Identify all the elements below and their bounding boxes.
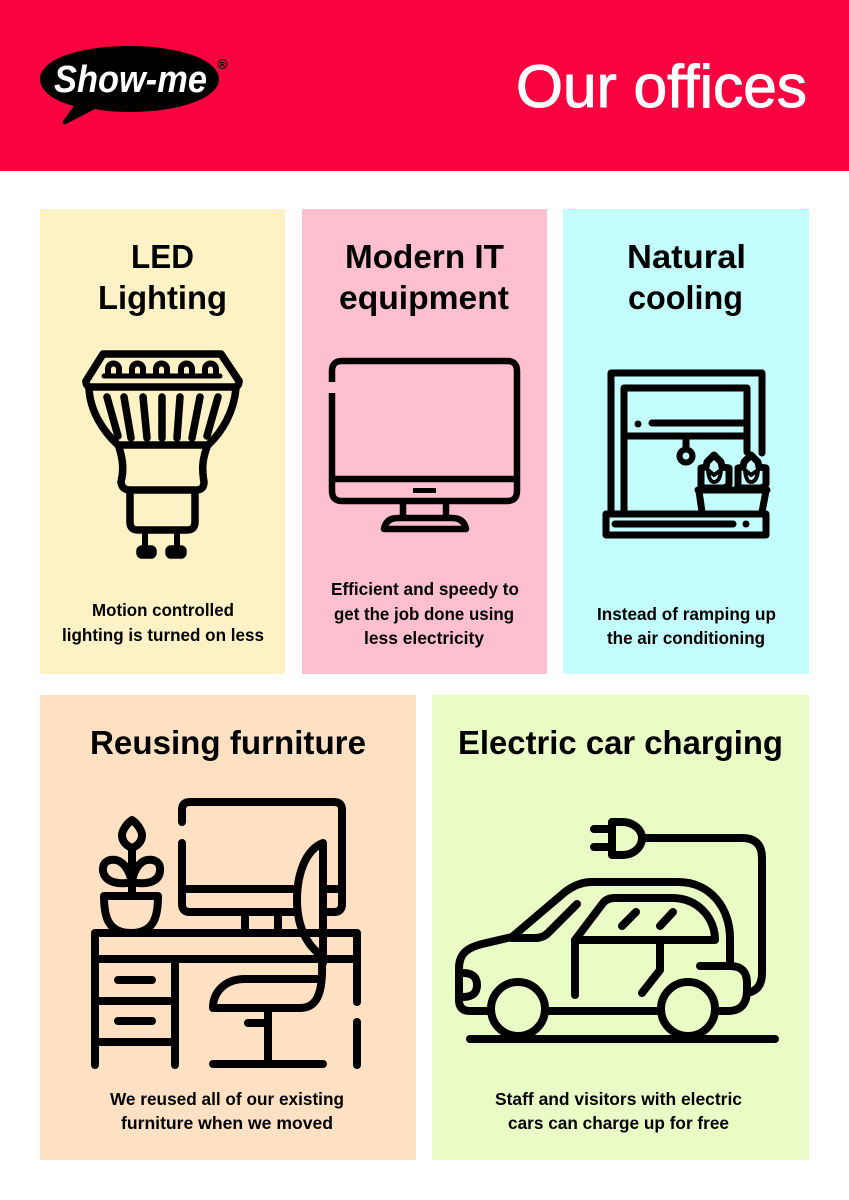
caption: Efficient and speedy to bbox=[331, 579, 519, 599]
icon: desk, monitor, plant and chair bbox=[95, 802, 357, 1065]
title: Our offices bbox=[516, 53, 807, 120]
caption bbox=[62, 600, 264, 645]
caption: less electricity bbox=[364, 628, 484, 648]
caption: the air conditioning bbox=[607, 628, 765, 648]
heading: Natural cooling: Natural bbox=[627, 238, 746, 275]
caption: get the job done using bbox=[334, 604, 514, 624]
panel: Natural cooling bbox=[563, 209, 809, 674]
icon: window with plants bbox=[606, 373, 767, 535]
header banner bbox=[0, 0, 849, 171]
heading: Modern IT equipment: Modern IT bbox=[345, 238, 504, 275]
caption bbox=[495, 1089, 742, 1133]
caption: Motion controlled bbox=[92, 600, 234, 620]
icon: computer monitor bbox=[332, 361, 517, 529]
heading: LED Lighting bbox=[98, 238, 227, 316]
heading: Modern IT equipment: equipment bbox=[339, 279, 509, 316]
caption bbox=[110, 1089, 344, 1133]
panel: LED lighting bbox=[40, 209, 285, 674]
panel: Reusing furniture bbox=[40, 695, 416, 1160]
heading: Natural cooling bbox=[627, 238, 746, 316]
heading: Natural cooling: cooling bbox=[628, 279, 743, 316]
logo: Show-me speech bubble: Show-me bbox=[54, 59, 207, 101]
heading: Reusing furniture: Reusing furniture bbox=[90, 724, 366, 761]
heading: LED Lighting: LED bbox=[131, 238, 194, 275]
caption bbox=[331, 579, 519, 648]
caption bbox=[597, 604, 776, 648]
caption: Instead of ramping up bbox=[597, 604, 776, 624]
logo: Show-me speech bubble bbox=[40, 46, 227, 124]
panel: Modern IT equipment bbox=[302, 209, 547, 674]
panel: Electric car charging bbox=[432, 695, 809, 1160]
heading: Electric car charging: Electric car charging bbox=[458, 724, 783, 761]
caption: cars can charge up for free bbox=[508, 1113, 729, 1133]
caption: We reused all of our existing bbox=[110, 1089, 344, 1109]
icon: electric car with plug bbox=[459, 822, 775, 1039]
caption: lighting is turned on less bbox=[62, 625, 264, 645]
caption: furniture when we moved bbox=[121, 1113, 333, 1133]
heading: LED Lighting: Lighting bbox=[98, 279, 227, 316]
logo: Show-me speech bubble: R bbox=[220, 60, 226, 69]
heading: Modern IT equipment bbox=[339, 238, 509, 316]
icon: LED bulb bbox=[86, 354, 239, 555]
caption: Staff and visitors with electric bbox=[495, 1089, 742, 1109]
